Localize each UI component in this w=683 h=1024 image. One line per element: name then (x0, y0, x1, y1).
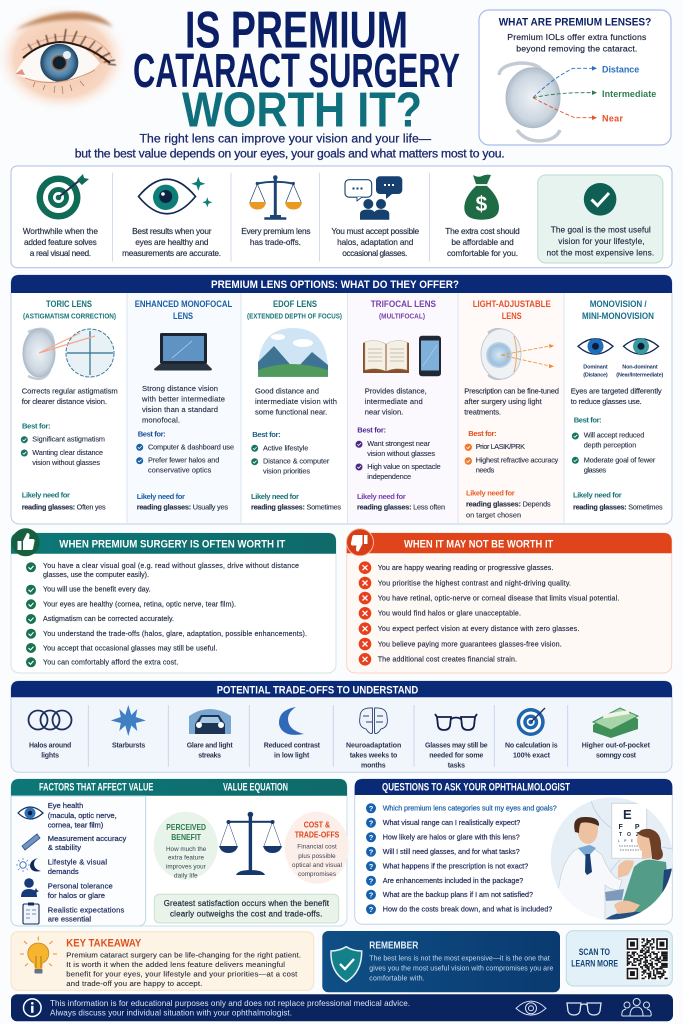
icon: light-adjustable lens (481, 329, 554, 379)
checklist: worth it: Astigmatism can be corrected accurately. (43, 615, 174, 623)
column: enhanced monofocal lens: reading glasses: Usually yes (137, 502, 228, 511)
column: trifocal lens: Best for: (357, 425, 386, 434)
icon: footer eye (516, 1001, 546, 1015)
panel: premium lens options (11, 275, 672, 524)
checklist: not worth it: You would find halos or glare unacceptable. (378, 610, 521, 618)
column: edof lens: EDOF LENS (273, 299, 317, 310)
column: toric lens: TORIC LENS (46, 299, 92, 310)
text: eyes: measurements are accurate. (122, 248, 221, 258)
column: trifocal lens: (MULTIFOCAL) (379, 313, 425, 320)
column: trifocal lens: TRIFOCAL LENS (371, 299, 436, 310)
column: trifocal lens: near vision. (365, 408, 403, 417)
text: glasses: Glasses may still be (425, 743, 488, 750)
callout: greatest satisfaction: clearly outweighs the cost and trade-offs. (170, 910, 322, 919)
column: enhanced monofocal lens: conservative optics (148, 466, 212, 475)
column: toric lens: reading glasses: Often yes (22, 502, 106, 511)
icon: QR code (626, 937, 669, 980)
list: questions: ? (369, 862, 374, 871)
panel: factors and value equation: VALUE EQUATION (223, 782, 288, 794)
panel: factors and value equation: FACTORS THAT AFFECT VALUE (39, 782, 153, 794)
callout: greatest satisfaction: Greatest satisfaction occurs when the benefit (164, 899, 330, 908)
column: trifocal lens: Provides distance, (365, 386, 427, 395)
column: monovision: Non-dominant (622, 365, 658, 371)
callout: key takeaway: KEY TAKEAWAY (66, 937, 142, 949)
icon: dominant and non-dominant eyes (578, 338, 658, 354)
column: enhanced monofocal lens: ENHANCED MONOFOCAL (135, 299, 232, 310)
column: trifocal lens: independence (367, 472, 411, 481)
icon: footer glasses (567, 1003, 601, 1015)
column: light-adjustable lens (464, 299, 559, 519)
column: enhanced monofocal lens: Best for: (138, 430, 166, 439)
icon: glasses (435, 714, 477, 730)
panel: potential trade-offs: POTENTIAL TRADE-OFFS TO UNDERSTAND (217, 684, 418, 696)
column: enhanced monofocal lens: Likely need for (137, 492, 185, 501)
list: questions: How likely are halos or glare with this lens? (383, 833, 520, 842)
panel: when it may not be worth it: WHEN IT MAY NOT BE WORTH IT (404, 538, 554, 550)
icon: balance scale (249, 175, 302, 218)
icon: halos (28, 710, 72, 730)
callout: goal (538, 175, 663, 263)
callout: perceived benefit: How much the (166, 846, 207, 853)
column: monovision: depth perception (584, 441, 636, 450)
text: cost: be affordable and (451, 237, 514, 247)
hero eye illustration (2, 8, 122, 108)
panel: questions to ask your ophthalmologist: QUESTIONS TO ASK YOUR OPHTHALMOLOGIST (382, 781, 570, 793)
figure: patient (605, 828, 672, 920)
callout: perceived benefit: extra feature (168, 855, 204, 862)
callout: cost and trade-offs: plus possible (298, 853, 336, 860)
text: trade-offs: has trade-offs. (250, 237, 301, 247)
column: trifocal lens: intermediate and (365, 397, 423, 406)
column: edof lens (247, 299, 342, 511)
column: edof lens: intermediate vision with (255, 397, 337, 406)
icon: banknotes (593, 708, 638, 738)
column: trifocal lens: Want strongest near (367, 439, 431, 448)
panel: scan to learn more (566, 931, 672, 986)
list: questions: Will I still need glasses, and for what tasks? (383, 847, 520, 856)
column: enhanced monofocal lens: Strong distance vision (142, 384, 218, 393)
column: edof lens: Good distance and (255, 386, 319, 395)
column: monovision: MONOVISION / (590, 299, 647, 310)
text: cost: The extra cost should (445, 226, 520, 236)
callout: key takeaway: It is worth it when the added lens feature delivers meaningful (66, 960, 285, 969)
title: CATARACT SURGERY (133, 45, 460, 98)
list: questions: How do the costs break down, and what is included? (383, 905, 552, 914)
figure: doctor (557, 817, 634, 922)
callout: perceived benefit: PERCEIVED (166, 822, 206, 832)
panel: factors that affect value: Eye health (48, 801, 83, 810)
column: light-adjustable lens: Best for: (468, 429, 497, 438)
text: halos: Halos around (29, 743, 71, 750)
column: monovision: Moderate goal of fewer (584, 455, 656, 464)
text: trade-offs (241, 226, 310, 247)
subtitle: but the best value depends on your eyes, your goals and what matters most to you. (75, 146, 505, 160)
icon: target (517, 708, 545, 736)
panel: factors that affect value: (macula, optic nerve, (48, 811, 117, 820)
column: light-adjustable lens: treatments. (464, 408, 501, 417)
callout: remember: comfortable with. (369, 976, 425, 983)
checklist: not worth it: The additional cost creates financial strain. (378, 656, 517, 664)
panel: what are premium lenses: beyond removing the cataract. (516, 44, 637, 54)
panel: what are premium lenses: Distance (602, 65, 639, 75)
icon: money bag: $ (476, 193, 488, 216)
column: toric lens: Corrects regular astigmatism (22, 386, 118, 395)
text: trade-offs: Every premium lens (241, 226, 310, 236)
icon: clipboard (23, 902, 39, 924)
icon: shield (331, 947, 362, 982)
column: edof lens: Best for: (252, 430, 281, 439)
column: trifocal lens: Likely need for (357, 492, 406, 501)
title (133, 2, 460, 138)
panel: factors that affect value: & stability (48, 843, 81, 852)
callout: goal: vision for your lifestyle, (558, 236, 645, 246)
list: questions: ? (369, 847, 374, 856)
icon: brain (360, 708, 387, 734)
checklist: worth it: You will use the benefit every day. (43, 586, 151, 594)
column: edof lens: Likely need for (251, 492, 299, 501)
subtitle (75, 132, 505, 160)
panel: when it may not be worth it (346, 529, 672, 673)
callout: key takeaway: benefit for your eyes, your lifestyle and your priorities—at a cost (66, 970, 298, 979)
panel: factors that affect value: Personal tolerance (48, 881, 113, 890)
footer disclaimer bar (11, 994, 673, 1021)
column: enhanced monofocal lens: with better intermediate (141, 395, 225, 404)
text: halos: lights (41, 753, 59, 760)
subtitle: The right lens can improve your vision and your life— (140, 132, 432, 146)
column: toric lens: for clearer distance vision. (22, 397, 107, 406)
callout: cost and trade-offs (285, 812, 349, 884)
text: accept: occasional glasses. (342, 248, 407, 258)
column: light-adjustable lens: needs (476, 466, 495, 475)
column: light-adjustable lens: LENS (502, 311, 522, 322)
checklist: worth it: You understand the trade-offs (halos, glare, adaptation, possible enhancements). (43, 630, 307, 638)
panel: factors and value equation (11, 779, 349, 926)
text: cost: comfortable for you. (447, 248, 518, 258)
icon: people talking (345, 176, 402, 220)
callout: cost and trade-offs: optical and visual (292, 862, 342, 869)
icon: eye chart: E (623, 807, 632, 822)
icon: target (36, 174, 89, 220)
callout: perceived benefit: BENEFIT (171, 832, 202, 842)
list: questions (366, 803, 557, 914)
callout: remember: REMEMBER (369, 940, 419, 951)
checklist: not worth it: You expect perfect vision at every distance with zero glasses. (378, 625, 579, 633)
column: toric lens: vision without glasses (32, 458, 100, 467)
callout: cost and trade-offs: TRADE-OFFS (295, 829, 340, 839)
panel: factors that affect value: cornea, tear film) (48, 820, 104, 829)
text: cost: somngy cost (596, 753, 637, 760)
column: edof lens: some functional near. (255, 408, 327, 417)
column: enhanced monofocal lens: LENS (173, 311, 193, 322)
callout: key takeaway: Premium cataract surgery can be life-changing for the right patient. (66, 950, 301, 959)
text: glasses: tasks (448, 762, 465, 769)
checklist: worth it (26, 562, 307, 667)
callout: remember: gives you the most useful vision with compromises you are (369, 966, 553, 973)
checklist: worth it: glasses, use the computer easily). (43, 571, 149, 579)
callout: cost and trade-offs: Financial cost (297, 844, 337, 851)
text: contrast: Reduced contrast (264, 743, 321, 750)
panel: questions to ask your ophthalmologist (355, 779, 680, 925)
text: eyes: eyes are healthy and (135, 237, 209, 247)
panel: factors that affect value (11, 796, 146, 926)
illustration: doctor and patient (550, 798, 672, 920)
panel: potential trade-offs (11, 681, 672, 772)
panel: what are premium lenses: Intermediate (602, 89, 656, 99)
column: enhanced monofocal lens: monofocal. (142, 415, 180, 424)
panel: factors that affect value: Lifestyle & visual (48, 857, 107, 866)
column: monovision: Eyes are targeted differently (571, 386, 662, 395)
column: light-adjustable lens: Prior LASIK/PRK (476, 442, 525, 451)
footer disclaimer bar: Always discuss your individual situation with your ophthalmologist. (50, 1009, 292, 1018)
checklist: worth it: Your eyes are healthy (cornea, retina, optic nerve, tear film). (43, 600, 236, 608)
column: edof lens: vision priorities (263, 467, 310, 476)
column: monovision: reading glasses: Sometimes (573, 502, 663, 511)
icon: car glare (189, 709, 231, 734)
column: monovision: (Distance) (583, 372, 608, 378)
column: enhanced monofocal lens: Computer & dashboard use (148, 442, 234, 451)
icon: person (21, 878, 39, 897)
column: monovision: MINI-MONOVISION (582, 311, 654, 322)
text: need (23, 226, 98, 258)
icon: crescent moon (279, 707, 304, 735)
list: questions: What happens if the prescription is not exact? (383, 862, 528, 871)
list: questions: ? (369, 890, 374, 899)
text: accept: You must accept possible (331, 226, 419, 236)
column: monovision: Best for: (574, 416, 602, 425)
icon: footer people (622, 998, 651, 1016)
text: starbursts: Starbursts (112, 743, 145, 750)
list: questions: ? (369, 818, 374, 827)
panel: what are premium lenses: Premium IOLs offer extra functions (507, 32, 647, 42)
icon: toric lens and axis (23, 329, 114, 379)
column: monovision: Likely need for (573, 491, 622, 500)
panel: factors that affect value: for halos or glare (48, 891, 105, 900)
column: monovision: to reduce glasses use. (571, 397, 642, 406)
heading: lens options (11, 275, 672, 293)
icon: sun and moon (16, 858, 41, 872)
text: cost: Higher out-of-pocket (582, 743, 651, 750)
callout: perceived benefit: improves your (166, 864, 206, 871)
text: accept (331, 226, 419, 258)
text: contrast (264, 743, 321, 760)
column: toric lens: Best for: (22, 422, 51, 431)
column: trifocal lens (356, 299, 445, 511)
column: toric lens: Significant astigmatism (32, 435, 105, 444)
column: enhanced monofocal lens (135, 299, 234, 511)
icon: thumbs down (346, 529, 374, 556)
text: accept: halos, adaptation and (337, 237, 414, 247)
column: monovision: Dominant (583, 365, 608, 371)
panel: scan to learn more: LEARN MORE (571, 959, 618, 969)
column: monovision (571, 299, 663, 511)
panel: factors that affect value: are essential (48, 914, 91, 923)
icon: thumbs up (12, 528, 40, 556)
callout: perceived benefit (154, 812, 218, 880)
icon: balance scale (219, 812, 282, 875)
list: questions: What visual range can I realistically expect? (383, 818, 520, 827)
text: glasses (425, 743, 488, 769)
list: questions: ? (369, 833, 374, 842)
icon: information (24, 999, 41, 1016)
panel: factors that affect value: demands (48, 867, 79, 876)
callout: key takeaway: and trade-off you are happy to accept. (66, 979, 202, 988)
column: edof lens: reading glasses: Sometimes (251, 502, 341, 511)
text: need: added feature solves (24, 237, 97, 247)
checklist: worth it: You have a clear visual goal (e.g. read without glasses, drive without distance (43, 562, 299, 570)
list: questions: What are the backup plans if I am not satisfied? (383, 890, 533, 899)
column: light-adjustable lens: LIGHT-ADJUSTABLE (473, 299, 551, 310)
checklist: worth it: You can comfortably afford the extra cost. (43, 658, 178, 666)
column: edof lens: Active lifestyle (263, 443, 308, 452)
column: trifocal lens: vision without glasses (367, 449, 435, 458)
text: calculation: No calculation is (505, 743, 558, 750)
icon: eye (18, 807, 43, 819)
column: light-adjustable lens: reading glasses: Depends (466, 500, 551, 509)
footer disclaimer bar: This information is for educational purposes only and does not replace professional medical advice. (50, 999, 410, 1008)
icon: starburst (111, 705, 146, 736)
text: glasses: needed for some (429, 753, 483, 760)
callout: perceived benefit: daily life (174, 872, 198, 879)
list: questions: ? (369, 876, 374, 885)
callout: key takeaway (11, 932, 314, 990)
column: enhanced monofocal lens: vision than a standard (142, 405, 218, 414)
checklist: not worth it: You prioritise the highest contrast and night-driving quality. (378, 579, 571, 587)
checklist: not worth it: You are happy wearing reading or progressive glasses. (378, 564, 553, 572)
column: light-adjustable lens: Prescription can be fine-tuned (464, 386, 559, 395)
panel: scan to learn more: SCAN TO (579, 947, 610, 957)
callout: goal: not the most expensive lens. (546, 248, 654, 258)
checklist: worth it: You accept that occasional glasses may still be useful. (43, 644, 217, 652)
icon: eye chart (612, 803, 647, 858)
icon: book and phone (363, 336, 441, 376)
list: questions: Which premium lens categories suit my eyes and goals? (383, 804, 557, 813)
text: neuroadaptation: months (361, 762, 386, 769)
heading: lens options: PREMIUM LENS OPTIONS: WHAT DO THEY OFFER? (211, 279, 459, 291)
icon: money bag (464, 175, 499, 220)
callout: greatest satisfaction (154, 894, 339, 923)
panel: factors that affect value: Measurement accuracy (48, 834, 127, 843)
text: glare (187, 743, 233, 760)
text: cost (582, 743, 651, 760)
list: questions: ? (369, 804, 374, 813)
checklist: not worth it (359, 561, 619, 666)
title: WORTH IT? (182, 84, 422, 138)
column: monovision: glasses (584, 465, 606, 474)
icon: laptop (154, 333, 212, 370)
text: calculation: 100% exact (513, 753, 551, 760)
callout: remember: The best lens is not the most expensive—it is the one that (369, 956, 550, 963)
list: questions: Are enhancements included in the package? (383, 876, 523, 885)
text: neuroadaptation (346, 743, 401, 769)
column: edof lens: Distance & computer (263, 457, 330, 466)
panel: what are premium lenses: WHAT ARE PREMIUM LENSES? (499, 17, 652, 29)
column: enhanced monofocal lens: Prefer fewer halos and (148, 456, 219, 465)
list: questions: ? (369, 905, 374, 914)
icon: eye chart: L P E D (618, 839, 640, 843)
text: eyes (122, 226, 221, 258)
column: light-adjustable lens: after surgery using light (464, 397, 543, 406)
column: trifocal lens: reading glasses: Less often (357, 502, 445, 511)
callout: cost and trade-offs: COST & (304, 819, 330, 829)
column: edof lens: (EXTENDED DEPTH OF FOCUS) (247, 313, 342, 320)
text: glare: streaks (198, 753, 221, 760)
callout: remember (322, 931, 560, 992)
column: trifocal lens: High value on spectacle (367, 462, 441, 471)
panel: factors that affect value: Realistic expectations (48, 905, 125, 914)
column: monovision: Will accept reduced (584, 431, 644, 440)
text: neuroadaptation: takes weeks to (350, 753, 397, 760)
icon: eye chart: F P (618, 824, 640, 831)
text: halos (29, 743, 71, 760)
callout: goal: The goal is the most useful (551, 225, 651, 235)
text: eyes: Best results when your (132, 226, 212, 236)
icon: ruler (22, 834, 40, 850)
text: contrast: in low light (274, 753, 310, 760)
checklist: not worth it: You have retinal, optic-nerve or corneal disease that limits visual potential. (378, 594, 619, 602)
checklist: not worth it: You believe paying more guarantees glasses-free vision. (378, 640, 562, 648)
icon: light bulb (20, 936, 57, 974)
text: cost (445, 226, 520, 258)
column: toric lens: Wanting clear distance (32, 448, 103, 457)
panel: when premium surgery is often worth it (11, 528, 336, 673)
column: light-adjustable lens: Likely need for (466, 488, 515, 497)
panel: when premium surgery is often worth it: WHEN PREMIUM SURGERY IS OFTEN WORTH IT (59, 538, 286, 550)
column: toric lens: (ASTIGMATISM CORRECTION) (23, 313, 116, 320)
panel: key points banner (11, 166, 672, 268)
text: need: a real visual need. (30, 248, 91, 258)
icon: eye chart: T O Z (619, 832, 639, 838)
title: IS PREMIUM (185, 2, 408, 60)
panel: what are premium lenses (479, 10, 671, 145)
icon: eye with sparkles (138, 177, 212, 214)
icon: mountain landscape (258, 328, 328, 377)
column: toric lens (21, 299, 118, 511)
panel: what are premium lenses: Near (602, 114, 623, 124)
column: light-adjustable lens: Highest refractive accuracy (476, 456, 559, 465)
column: toric lens: Likely need for (22, 491, 70, 500)
text: calculation (505, 743, 558, 760)
callout: cost and trade-offs: compromises (298, 871, 336, 878)
text: need: Worthwhile when the (23, 226, 98, 236)
text: glare: Glare and light (187, 743, 233, 750)
column: monovision: (Near/Intermediate) (616, 372, 663, 378)
column: light-adjustable lens: on target chosen (466, 510, 521, 519)
icon: premium lens with focus arrows (499, 63, 597, 141)
text: neuroadaptation: Neuroadaptation (346, 743, 401, 750)
